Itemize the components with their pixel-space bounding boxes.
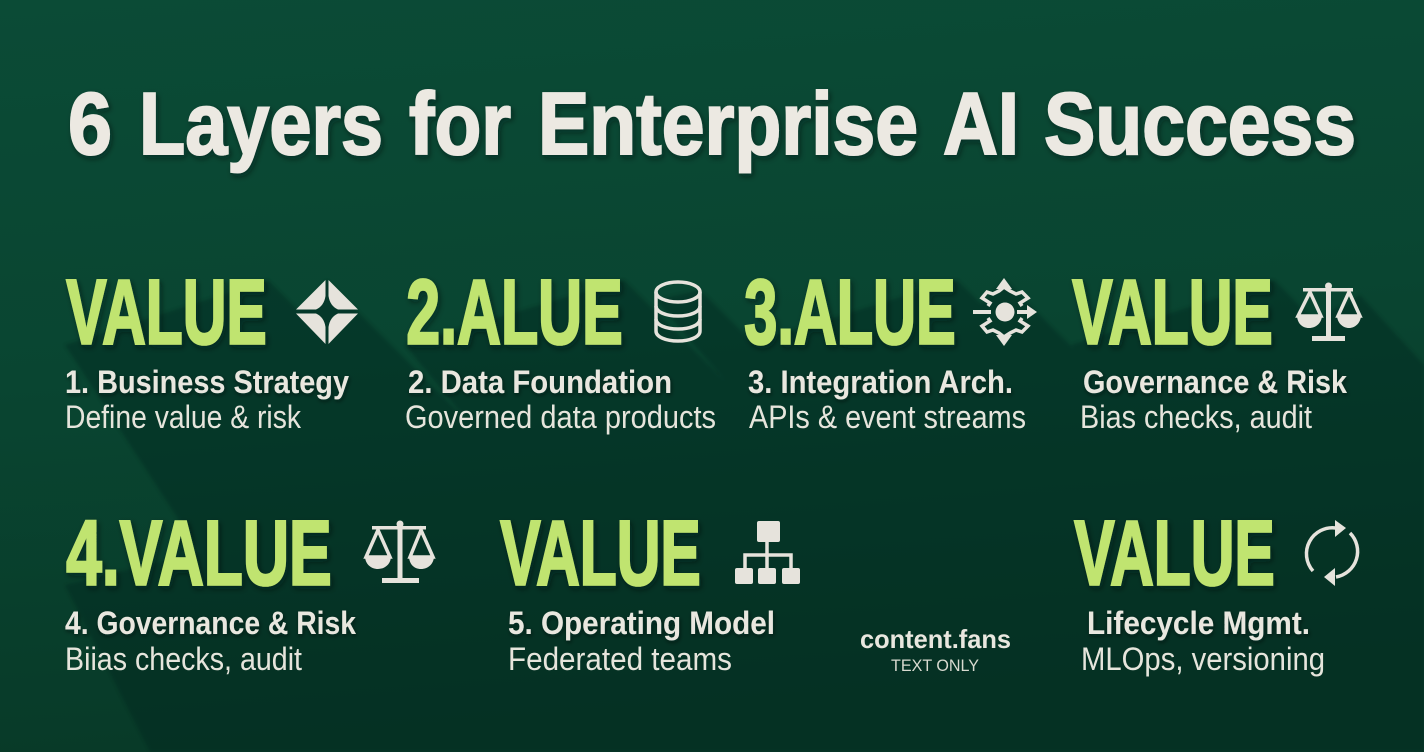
- description: Federated teams: [508, 641, 732, 677]
- icon: scales: [365, 520, 434, 583]
- description: Governed data products: [405, 399, 716, 435]
- heading: 3. Integration Arch.: [748, 364, 1013, 400]
- icon: database: [656, 282, 700, 341]
- description: Biias checks, audit: [65, 641, 302, 677]
- icon: scales: [1297, 282, 1361, 341]
- panel: business strategy: [65, 262, 358, 435]
- heading: 5. Operating Model: [508, 605, 775, 641]
- description: APIs & event streams: [749, 399, 1026, 435]
- panel: governance and risk upper: [1072, 262, 1361, 435]
- panel: operating model: [500, 502, 800, 677]
- heading: Lifecycle Mgmt.: [1087, 605, 1310, 641]
- icon: integration hub: [973, 278, 1037, 346]
- icon: refresh arrows: [1306, 520, 1358, 586]
- panel: integration architecture: [744, 262, 1037, 435]
- big label: 3.ALUE: [744, 262, 956, 364]
- icon: diamond compass: [296, 280, 358, 344]
- brand name: content.fans: [860, 624, 1011, 654]
- big label: 4.VALUE: [66, 502, 332, 604]
- big label: VALUE: [500, 502, 701, 604]
- heading: 1. Business Strategy: [65, 364, 349, 400]
- description: Define value & risk: [65, 399, 302, 435]
- heading: 2. Data Foundation: [408, 364, 672, 400]
- title: Success: [1044, 74, 1356, 173]
- panel: governance and risk lower: [65, 502, 434, 677]
- diagonal long shadows: [65, 279, 1424, 752]
- big label: VALUE: [1072, 262, 1273, 364]
- brand mark: [860, 624, 1011, 675]
- brand caption: TEXT ONLY: [891, 656, 979, 675]
- title: Layers: [139, 74, 383, 173]
- description: MLOps, versioning: [1081, 641, 1325, 677]
- panel: data foundation: [405, 262, 716, 435]
- heading: Governance & Risk: [1083, 364, 1347, 400]
- heading: 4. Governance & Risk: [65, 605, 356, 641]
- title: Enterprise: [538, 74, 918, 173]
- description: Bias checks, audit: [1080, 399, 1312, 435]
- title: AI: [943, 74, 1019, 173]
- big label: VALUE: [1074, 502, 1275, 604]
- big label: 2.ALUE: [406, 262, 623, 364]
- title: for: [409, 74, 511, 173]
- big label: VALUE: [66, 262, 267, 364]
- panel: lifecycle management: [1074, 502, 1358, 677]
- title: 6: [68, 74, 112, 173]
- icon: org chart: [735, 521, 800, 584]
